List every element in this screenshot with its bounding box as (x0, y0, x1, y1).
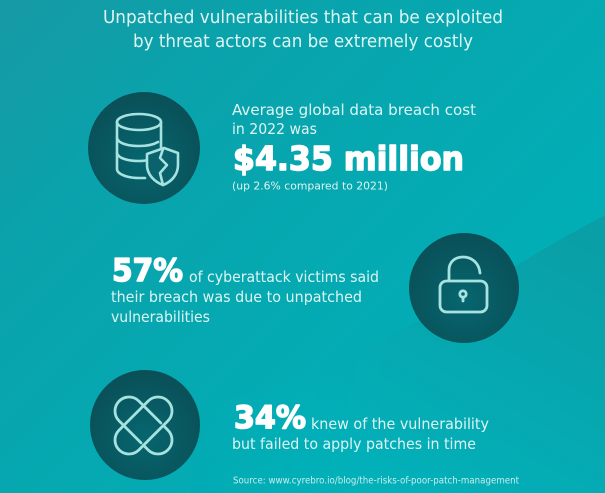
text: victims: vulnerabilities (111, 309, 210, 326)
text: average cost: Average global data breach cost (232, 102, 476, 119)
panel: unpatched breach share (111, 233, 519, 343)
text: knew of vulnerability: but failed to apply patches in time (232, 436, 476, 453)
title: by threat actors can be extremely costly (133, 32, 473, 52)
text: victims: their breach was due to unpatched (111, 289, 362, 306)
big number: $4.35 million: $4.35 million (233, 139, 464, 178)
big number: 34%: 34% (234, 400, 306, 436)
text: victims: of cyberattack victims said (189, 269, 379, 286)
text: average cost: in 2022 was (232, 121, 317, 138)
big number: 57%: 57% (112, 253, 183, 289)
source: Source: www.cyrebro.io/blog/the-risks-of-poor-patch-management (233, 476, 519, 486)
text: victims (111, 269, 379, 326)
icon: database with cracked shield (88, 92, 200, 204)
panel: failed to patch (90, 370, 489, 480)
title: Unpatched vulnerabilities that can be exploited (103, 8, 503, 28)
text: knew of vulnerability: knew of the vulnerability (311, 416, 489, 433)
text: average cost (232, 102, 476, 138)
panel: data breach cost (88, 92, 476, 204)
icon: crossed bandage (90, 370, 200, 480)
text: knew of vulnerability (232, 416, 489, 453)
title (103, 8, 503, 52)
icon: open padlock (409, 233, 519, 343)
text: year comparison: (up 2.6% compared to 2021) (232, 180, 388, 192)
